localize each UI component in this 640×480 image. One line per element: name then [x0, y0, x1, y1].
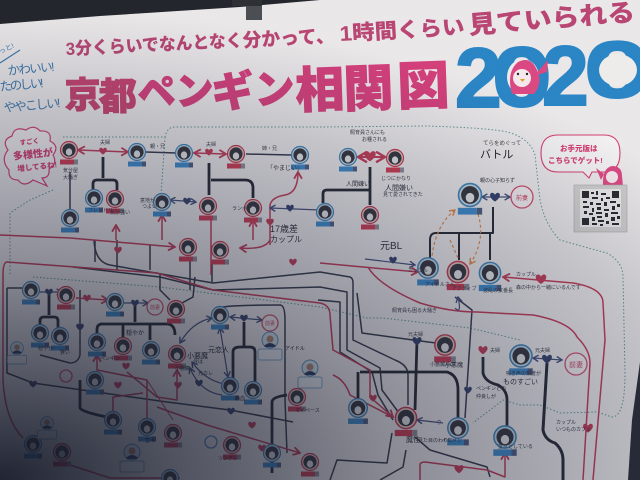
- year 2020 with penguin mascot: 2: [542, 29, 589, 123]
- captions: small labels: お種される: [362, 136, 387, 143]
- main title: 京: [64, 74, 101, 116]
- text: battle: [480, 140, 521, 161]
- thick family tree lines: [40, 157, 563, 480]
- captions: small labels: カップル: [516, 272, 536, 278]
- captions: small labels: [38, 129, 591, 462]
- captions: small labels: 親の心子知らず: [480, 177, 515, 184]
- labels in ex-wife circles: 前妻: [516, 194, 528, 202]
- main title: ギ: [211, 68, 254, 116]
- captions: small labels: ランボー: [232, 205, 252, 212]
- main title: 図: [396, 57, 450, 117]
- year 2020 with penguin mascot: [455, 25, 640, 125]
- captions: small labels: ツンデレ: [218, 455, 238, 462]
- captions: small labels: 森の中から一緒にいるんです: [516, 284, 581, 291]
- icon: pink penguin: [596, 166, 623, 186]
- captions: small labels: 姉・兄: [262, 145, 277, 152]
- captions: small labels: カップル: [408, 268, 428, 274]
- captions: small labels: 気分屋: [63, 167, 78, 174]
- captions: large handwriting: ものすごい: [503, 377, 538, 386]
- navy hearts on former couple lines: [29, 193, 552, 415]
- main title: [64, 57, 450, 119]
- captions: large handwriting: 人間嫌い: [385, 183, 413, 192]
- captions: small labels: 賢い: [60, 350, 70, 356]
- speech bubble: diversity: [4, 127, 57, 186]
- captions: small labels: 気が強い: [110, 209, 130, 216]
- captions: large handwriting: 魔性: [406, 435, 420, 444]
- captions: small labels: 親・兄: [150, 144, 165, 150]
- text: battle: バトル: [480, 148, 513, 161]
- labels in ex-wife circles: 前妻: [569, 360, 583, 369]
- captions: small labels: 小悪魔系の: [430, 361, 455, 368]
- captions: large handwriting: 小悪魔: [445, 361, 463, 369]
- year 2020 with penguin mascot: 0: [492, 31, 552, 124]
- dark ceiling above poster: [0, 0, 320, 24]
- captions: small labels: 仲良しが: [476, 393, 496, 400]
- main title: 都: [98, 76, 137, 119]
- captions: large handwriting: [126, 164, 538, 444]
- subtitle: 1時間くらい: [339, 16, 465, 46]
- captions: small labels: いつものカフェ: [556, 427, 591, 433]
- captions: small labels: 大騒ぎ: [63, 174, 78, 181]
- tagline: cute, fun, complicated: ややこしい!: [3, 96, 61, 115]
- orange dashed rivalry arrows: [432, 210, 481, 264]
- captions: large handwriting: ?: [437, 420, 441, 427]
- captions: small labels: じつにかなり: [381, 175, 411, 182]
- main title: ン: [254, 68, 295, 113]
- captions: small labels: ペンギン: [100, 356, 120, 362]
- captions: small labels: 波乱の女番長: [483, 287, 513, 294]
- captions: small labels: 堂々としている: [498, 443, 533, 450]
- captions: small labels: 穏やか: [38, 345, 53, 352]
- teal dotted lines: [10, 126, 625, 423]
- subtitle: 見ていられる: [467, 0, 636, 40]
- hearts on relationship lines: [83, 148, 593, 473]
- dark relationship lines: [7, 152, 490, 480]
- labels in ex-wife circles: 前妻: [265, 320, 275, 327]
- main title: ペ: [137, 72, 176, 115]
- year 2020 with penguin mascot: 2: [455, 31, 502, 125]
- captions: small labels: アイドル: [285, 346, 305, 352]
- captions: small labels: イケメン: [442, 437, 462, 444]
- captions: large handwriting: 17歳差: [270, 223, 298, 234]
- QR code: [574, 185, 627, 232]
- navy divorce and bi-directional arrows: [37, 197, 562, 423]
- captions: large handwriting: 元BL: [380, 241, 403, 252]
- speech bubble: get your copy here: こちらでゲット!: [548, 155, 603, 165]
- captions: small labels: 飼育員さんにも: [350, 129, 385, 136]
- labels in ex-wife circles: 前妻: [150, 304, 160, 311]
- captions: small labels: 小悪魔: [175, 365, 190, 372]
- captions: small labels: フレンドリー: [88, 208, 118, 214]
- speech bubble: diversity: すごく: [19, 136, 40, 147]
- penguin nodes: large right group: [348, 184, 533, 456]
- red couple lines: [0, 150, 605, 480]
- captions: small labels: 飼育員も困る大騒ぎ: [392, 307, 437, 314]
- main title: 相: [294, 63, 345, 119]
- text: battle: てらをめぐって: [483, 140, 521, 147]
- captions: small labels: カップル: [556, 420, 576, 426]
- main title: 関: [342, 60, 394, 118]
- penguin nodes: middle left group: [22, 282, 319, 480]
- dark wall at bottom-right edge: [628, 362, 640, 480]
- speech bubble: get your copy here: お手元版は: [560, 143, 598, 153]
- labels in ex-wife circles: [150, 194, 583, 369]
- subtitle: 分かって、: [242, 25, 335, 52]
- captions: small labels: 元夫婦: [408, 331, 423, 338]
- captions: small labels: 今は: [193, 358, 203, 365]
- main title: ン: [175, 71, 214, 114]
- subtitle: [65, 0, 636, 59]
- captions: large handwriting: 元恋人: [208, 346, 229, 354]
- captions: large handwriting: 「やまじい」: [267, 164, 303, 172]
- captions: large handwriting: 小悪魔: [187, 351, 208, 360]
- captions: small labels: 元夫婦: [535, 347, 550, 354]
- captions: small labels: つよい: [142, 204, 157, 210]
- captions: small labels: 堂々: [145, 437, 155, 444]
- captions: small labels: 熱血: [235, 395, 245, 402]
- captions: small labels: 見た目のわりに: [418, 437, 453, 444]
- captions: small labels: 夫婦: [100, 139, 110, 146]
- speech bubble: get your copy here: [541, 135, 620, 178]
- speech bubble: diversity: 増してるね!: [17, 159, 57, 173]
- tagline: cute, fun, complicated: かわいい!: [7, 60, 55, 78]
- captions: large handwriting: カップル: [270, 235, 302, 244]
- subtitle: 3分くらいでなんとなく: [65, 30, 243, 59]
- captions: small labels: 意地が: [140, 197, 155, 204]
- captions: large handwriting: 穏やか: [126, 329, 144, 337]
- captions: small labels: マイペース: [295, 408, 320, 414]
- captions: small labels: 夫婦: [206, 141, 216, 148]
- captions: small labels: ペンギンとの: [476, 386, 506, 392]
- tagline: cute, fun, complicated: [0, 42, 61, 115]
- captions: large handwriting: 人間嫌い: [346, 180, 370, 188]
- captions: small labels: アクティブ: [452, 285, 476, 292]
- captions: small labels: 見て愛されてきた: [383, 191, 423, 198]
- captions: small labels: 鳴き声の頻度が: [506, 370, 541, 377]
- ex-wife circles: [60, 186, 587, 448]
- captions: small labels: 元カレ: [198, 371, 213, 377]
- tagline: cute, fun, complicated: たのしい!: [0, 76, 44, 94]
- speech bubble: diversity: 多様性が: [12, 146, 54, 163]
- penguin nodes: top rows: [60, 142, 404, 264]
- captions: small labels: アイドルさん: [425, 281, 455, 288]
- captions: small labels: 夫婦: [490, 347, 500, 354]
- keeper portraits: [7, 332, 322, 472]
